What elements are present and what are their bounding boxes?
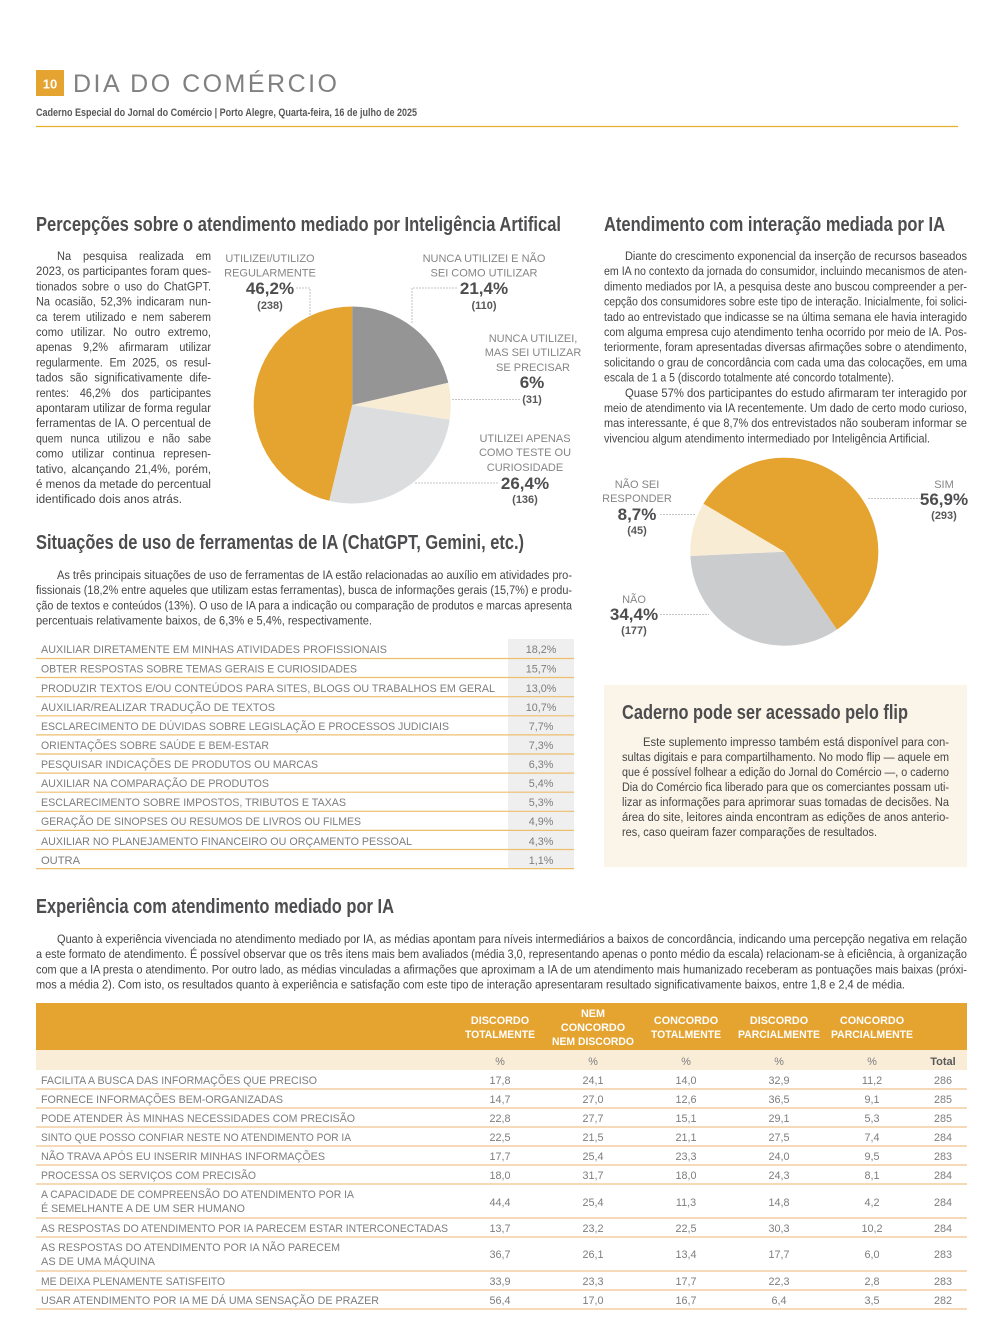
panel text: sultas digitais e para compartilhamento. No modo flip — aquele em xyxy=(622,750,949,764)
row xyxy=(36,1294,967,1309)
row xyxy=(36,797,574,811)
label: utilizei regularmente: (238) xyxy=(257,300,283,312)
row xyxy=(36,664,574,678)
pie chart: uso de IA xyxy=(224,252,581,506)
row: 17,7 xyxy=(675,1276,697,1288)
row xyxy=(36,1112,967,1127)
table header: % xyxy=(681,1056,691,1068)
row: AUXILIAR/REALIZAR TRADUÇÃO DE TEXTOS xyxy=(41,701,275,714)
publication title: DIA DO COMÉRCIO xyxy=(73,69,337,98)
table header: DISCORDO xyxy=(750,1015,808,1027)
row xyxy=(36,1074,967,1089)
text block: atendimento: escala de 1 a 5 (discordo totalmente até concordo totalmente). xyxy=(604,371,894,385)
panel text: res, caso queiram fazer comparações de resultados. xyxy=(622,825,877,839)
label: teste ou curiosidade: CURIOSIDADE xyxy=(487,462,563,474)
row: 44,4 xyxy=(489,1197,511,1209)
row: 18,2% xyxy=(526,644,557,656)
label: não: (177) xyxy=(621,625,647,637)
panel text: Dia do Comércio fica liberado para que os comerciantes possam uti- xyxy=(622,780,949,794)
row: 14,7 xyxy=(489,1094,511,1106)
label: não sei responder: (45) xyxy=(627,525,647,537)
row: 4,2 xyxy=(864,1197,880,1209)
row: 4,9% xyxy=(529,816,554,828)
row: 18,0 xyxy=(489,1170,511,1182)
row: 284 xyxy=(934,1197,952,1209)
label: não xyxy=(610,593,709,637)
row xyxy=(36,1276,967,1290)
row xyxy=(36,1150,967,1165)
row: 23,3 xyxy=(582,1276,604,1288)
row xyxy=(36,720,574,735)
table header: NEM xyxy=(581,1008,605,1020)
label: teste ou curiosidade: (136) xyxy=(512,494,538,506)
row: 33,9 xyxy=(489,1276,511,1288)
text block: percepções: apenas 9,2% afirmaram utilizar xyxy=(36,340,211,354)
row: 31,7 xyxy=(582,1170,604,1182)
text block: situações: As três principais situações de uso de ferramentas de IA estão relacionadas ao auxílio em atividades pro- xyxy=(57,568,572,582)
row: 12,6 xyxy=(675,1094,697,1106)
label: não sei responder: 8,7% xyxy=(618,505,656,524)
row: 27,7 xyxy=(582,1113,604,1125)
label: nunca utilizei mas sei: SE PRECISAR xyxy=(496,362,570,374)
slice: nunca utilizei mas sei xyxy=(352,383,451,420)
table: experiência xyxy=(36,1003,967,1309)
label: nunca utilizei mas sei: (31) xyxy=(522,394,542,406)
row: 283 xyxy=(934,1249,952,1261)
row: 6,4 xyxy=(771,1295,787,1307)
label: sim: SIM xyxy=(934,479,954,491)
row: 15,1 xyxy=(675,1113,697,1125)
table: situações de uso xyxy=(36,639,574,869)
row: 1,1% xyxy=(529,855,554,867)
text block: percepções: ca terem utilizado e nem saberem xyxy=(36,310,211,324)
slice: não xyxy=(690,552,837,646)
row: 13,0% xyxy=(526,683,557,695)
row xyxy=(36,836,574,850)
text block: percepções: Na pesquisa realizada em xyxy=(57,249,211,263)
row: 26,1 xyxy=(582,1249,604,1261)
row: 285 xyxy=(934,1094,952,1106)
text block: percepções: ferramentas de IA. O percentual de xyxy=(36,416,211,430)
row: 3,5 xyxy=(864,1295,880,1307)
row: 7,4 xyxy=(864,1132,880,1144)
row: 282 xyxy=(934,1295,952,1307)
row: PRODUZIR TEXTOS E/OU CONTEÚDOS PARA SITES, BLOGS OU TRABALHOS EM GERAL xyxy=(41,682,495,695)
row: FACILITA A BUSCA DAS INFORMAÇÕES QUE PRECISO xyxy=(41,1074,317,1087)
row xyxy=(36,758,574,773)
label: nunca utilizei e não sei: 21,4% xyxy=(460,279,508,298)
text block: atendimento: Quase 57% dos participantes do estudo afirmaram ter interagido por xyxy=(625,386,967,400)
row: 25,4 xyxy=(582,1197,604,1209)
label: nunca utilizei e não sei: NUNCA UTILIZEI E NÃO xyxy=(423,252,546,265)
row: 11,2 xyxy=(862,1075,882,1087)
label: nunca utilizei mas sei: NUNCA UTILIZEI, xyxy=(489,333,577,345)
row: 17,0 xyxy=(582,1295,604,1307)
table header: CONCORDO xyxy=(654,1015,718,1027)
label: teste ou curiosidade: COMO TESTE OU xyxy=(479,447,571,459)
row: 23,3 xyxy=(675,1151,697,1163)
panel heading: Caderno pode ser acessado pelo flip xyxy=(622,702,908,724)
panel text: área do site, leitores ainda encontram as edições de anos anterio- xyxy=(622,810,949,824)
row xyxy=(36,1093,967,1108)
row: PODE ATENDER ÀS MINHAS NECESSIDADES COM PRECISÃO xyxy=(41,1112,355,1125)
row: 5,4% xyxy=(529,778,554,790)
row: AUXILIAR DIRETAMENTE EM MINHAS ATIVIDADES PROFISSIONAIS xyxy=(41,644,387,656)
table header: CONCORDO xyxy=(561,1022,625,1034)
row: 36,7 xyxy=(489,1249,511,1261)
slice: nunca utilizei e não sei xyxy=(352,306,448,405)
text block: percepções: quem nunca utilizou e não sabe xyxy=(36,431,211,445)
heading: situações: Situações de uso de ferramentas de IA (ChatGPT, Gemini, etc.) xyxy=(36,532,524,554)
row: 284 xyxy=(934,1223,952,1235)
row: 6,3% xyxy=(529,759,554,771)
table header: DISCORDO xyxy=(471,1015,529,1027)
slice: utilizei regularmente xyxy=(254,306,352,501)
row: AS RESPOSTAS DO ATENDIMENTO POR IA PARECEM ESTAR INTERCONECTADAS xyxy=(41,1223,448,1235)
text block: percepções xyxy=(36,249,211,506)
label: não: NÃO xyxy=(622,593,646,606)
panel text: que é possível folhear a edição do Jornal do Comércio —, o caderno xyxy=(622,765,949,779)
row xyxy=(36,1241,967,1271)
row: 32,9 xyxy=(768,1075,790,1087)
row: 22,8 xyxy=(489,1113,511,1125)
label: nunca utilizei mas sei: 6% xyxy=(520,373,544,392)
text block: percepções: regularmente. Em 2025, os resul- xyxy=(36,355,211,369)
row: 25,4 xyxy=(582,1151,604,1163)
text block: situações: percentuais relativamente baixos, de 6,3% e 5,4%, respectivamente. xyxy=(36,614,372,628)
row xyxy=(36,1169,967,1184)
row: USAR ATENDIMENTO POR IA ME DÁ UMA SENSAÇÃO DE PRAZER xyxy=(41,1294,379,1307)
row: É SEMELHANTE A DE UM SER HUMANO xyxy=(41,1202,245,1215)
label: sim: 56,9% xyxy=(920,490,968,509)
row: 16,7 xyxy=(675,1295,697,1307)
text block: atendimento: vivenciou algum atendimento intermediado por Inteligência Artificial. xyxy=(604,431,930,445)
text block: atendimento: Diante do crescimento exponencial da inserção de recursos baseados xyxy=(625,249,967,263)
page number badge: 10 xyxy=(43,76,57,92)
label: nunca utilizei mas sei: MAS SEI UTILIZAR xyxy=(485,347,581,359)
table header: % xyxy=(774,1056,784,1068)
text block: situações: fissionais (18,2% entre aqueles que utilizam estas ferramentas), busca de informações gerais (15,7%) e produ- xyxy=(36,583,572,597)
label: nunca utilizei e não sei: (110) xyxy=(471,300,497,312)
row: 17,7 xyxy=(768,1249,790,1261)
row: ORIENTAÇÕES SOBRE SAÚDE E BEM-ESTAR xyxy=(41,739,269,752)
pie chart: interação com IA xyxy=(602,458,968,646)
row: A CAPACIDADE DE COMPREENSÃO DO ATENDIMENTO POR IA xyxy=(41,1188,354,1201)
row: 21,5 xyxy=(582,1132,604,1144)
row xyxy=(36,1188,967,1218)
text block: atendimento xyxy=(604,249,967,445)
row: 13,7 xyxy=(489,1223,511,1235)
label: teste ou curiosidade: UTILIZEI APENAS xyxy=(479,433,571,445)
row: AUXILIAR NO PLANEJAMENTO FINANCEIRO OU ORÇAMENTO PESSOAL xyxy=(41,836,412,848)
row: 4,3% xyxy=(529,836,554,848)
text block: percepções: 2023, os participantes foram ques- xyxy=(36,264,211,278)
row: 285 xyxy=(934,1113,952,1125)
text block: percepções: identificado dois anos atrás. xyxy=(36,492,182,506)
text block: percepções: como utilizar. No outro extremo, xyxy=(36,325,211,339)
text block: percepções: tativo, alcançando 21,4%, porém, xyxy=(36,462,211,476)
row: 56,4 xyxy=(489,1295,511,1307)
label: não sei responder: RESPONDER xyxy=(602,493,672,505)
row: 29,1 xyxy=(768,1113,790,1125)
label: sim: (293) xyxy=(931,510,957,522)
label: utilizei regularmente xyxy=(224,253,316,320)
masthead xyxy=(36,69,958,126)
table header: % xyxy=(588,1056,598,1068)
row: 27,0 xyxy=(582,1094,604,1106)
row: OUTRA xyxy=(41,855,81,867)
text block: percepções: apontaram utilizar de forma regular xyxy=(36,401,211,415)
row: 283 xyxy=(934,1276,952,1288)
row: 6,0 xyxy=(864,1249,880,1261)
slice: teste ou curiosidade xyxy=(329,405,450,504)
row xyxy=(36,1223,967,1237)
label: nunca utilizei e não sei: SEI COMO UTILIZAR xyxy=(431,268,538,280)
panel: caderno flip xyxy=(604,685,967,867)
row: GERAÇÃO DE SINOPSES OU RESUMOS DE LIVROS OU FILMES xyxy=(41,815,361,828)
row: 22,3 xyxy=(768,1276,790,1288)
text block: experiência xyxy=(36,932,967,992)
row: 286 xyxy=(934,1075,952,1087)
row: AS RESPOSTAS DO ATENDIMENTO POR IA NÃO PARECEM xyxy=(41,1241,340,1254)
row: 30,3 xyxy=(768,1223,790,1235)
row: 8,1 xyxy=(864,1170,880,1182)
label: nunca utilizei mas sei xyxy=(452,333,581,406)
text block: percepções: rentes: 46,2% dos participantes xyxy=(36,386,211,400)
row xyxy=(36,739,574,754)
row xyxy=(36,701,574,716)
row: ME DEIXA PLENAMENTE SATISFEITO xyxy=(41,1276,225,1288)
row: 5,3% xyxy=(529,797,554,809)
text block: percepções: como utilizar continua represen- xyxy=(36,447,211,461)
edition line: Caderno Especial do Jornal do Comércio | Porto Alegre, Quarta-feira, 16 de julho de 2025 xyxy=(36,107,417,119)
row: 2,8 xyxy=(864,1276,880,1288)
row: 24,1 xyxy=(582,1075,604,1087)
row: 27,5 xyxy=(768,1132,790,1144)
row: 22,5 xyxy=(675,1223,697,1235)
text block: situações xyxy=(36,568,572,628)
table header: Total xyxy=(930,1056,956,1068)
row xyxy=(36,855,574,869)
row: 5,3 xyxy=(864,1113,880,1125)
text block: experiência: mos a média 2). Com isto, os resultados quanto à experiência e satisfação com este tipo de interação apresentaram resultado significativamente baixos, entre 1,8 e 2,4 de média. xyxy=(36,978,905,992)
label: utilizei regularmente: REGULARMENTE xyxy=(224,268,316,280)
slice: não sei responder xyxy=(690,504,784,556)
row: ESCLARECIMENTO SOBRE IMPOSTOS, TRIBUTOS E TAXAS xyxy=(41,797,346,809)
label: sim xyxy=(868,479,968,522)
row: 24,3 xyxy=(768,1170,790,1182)
label: teste ou curiosidade xyxy=(415,433,571,506)
row: 9,1 xyxy=(864,1094,880,1106)
row xyxy=(36,644,574,658)
row xyxy=(36,777,574,792)
table header: % xyxy=(867,1056,877,1068)
row: 14,0 xyxy=(675,1075,697,1087)
row: OBTER RESPOSTAS SOBRE TEMAS GERAIS E CURIOSIDADES xyxy=(41,664,357,676)
table header: TOTALMENTE xyxy=(651,1029,721,1041)
row: SINTO QUE POSSO CONFIAR NESTE NO ATENDIMENTO POR IA xyxy=(41,1132,351,1144)
text block: percepções: Na ocasião, 52,3% indicaram nun- xyxy=(36,295,211,309)
table header: % xyxy=(495,1056,505,1068)
row: 7,7% xyxy=(529,721,554,733)
row: 22,5 xyxy=(489,1132,511,1144)
text block: percepções: é menos da metade do percentual xyxy=(36,477,211,491)
panel text: lizar as informações para aprimorar suas tomadas de decisões. Na xyxy=(622,795,949,809)
page number badge xyxy=(36,70,64,96)
text block: percepções: tionados sobre o uso do ChatGPT. xyxy=(36,279,211,293)
row: 21,1 xyxy=(675,1132,697,1144)
heading: percepções: Percepções sobre o atendimento mediado por Inteligência Artifical xyxy=(36,214,561,236)
row: 18,0 xyxy=(675,1170,697,1182)
row: 284 xyxy=(934,1170,952,1182)
row: ESCLARECIMENTO DE DÚVIDAS SOBRE LEGISLAÇÃO E PROCESSOS JUDICIAIS xyxy=(41,720,449,733)
table header: PARCIALMENTE xyxy=(738,1029,820,1041)
label: não sei responder xyxy=(602,478,695,537)
label: utilizei regularmente: 46,2% xyxy=(246,279,294,298)
row: 10,7% xyxy=(526,702,557,714)
table header: CONCORDO xyxy=(840,1015,904,1027)
table header: TOTALMENTE xyxy=(465,1029,535,1041)
label: utilizei regularmente: UTILIZEI/UTILIZO xyxy=(225,253,315,265)
label: teste ou curiosidade: 26,4% xyxy=(501,474,549,493)
row: FORNECE INFORMAÇÕES BEM-ORGANIZADAS xyxy=(41,1093,283,1106)
row: 7,3% xyxy=(529,740,554,752)
row: 13,4 xyxy=(675,1249,697,1261)
row: 10,2 xyxy=(861,1223,883,1235)
table header xyxy=(36,1003,967,1070)
slice: sim xyxy=(703,458,878,630)
row: 17,7 xyxy=(489,1151,511,1163)
text block: percepções: tados são significativamente dife- xyxy=(36,371,211,385)
row xyxy=(36,815,574,830)
row: 14,8 xyxy=(768,1197,790,1209)
row xyxy=(36,1132,967,1146)
row: 283 xyxy=(934,1151,952,1163)
row: 24,0 xyxy=(768,1151,790,1163)
row: 15,7% xyxy=(526,664,557,676)
heading: experiência: Experiência com atendimento mediado por IA xyxy=(36,896,394,918)
row: 11,3 xyxy=(676,1197,696,1209)
row: PROCESSA OS SERVIÇOS COM PRECISÃO xyxy=(41,1169,256,1182)
row: 23,2 xyxy=(582,1223,604,1235)
row: 36,5 xyxy=(768,1094,790,1106)
row: AUXILIAR NA COMPARAÇÃO DE PRODUTOS xyxy=(41,777,269,790)
row: 9,5 xyxy=(864,1151,880,1163)
table header: PARCIALMENTE xyxy=(831,1029,913,1041)
row: 284 xyxy=(934,1132,952,1144)
label: não sei responder: NÃO SEI xyxy=(615,478,659,491)
row: AS DE UMA MÁQUINA xyxy=(41,1255,156,1268)
text block: situações: ção de textos e conteúdos (13%). O uso de IA para a indicação ou comparação de produtos e marcas apresenta xyxy=(36,598,572,612)
table header: NEM DISCORDO xyxy=(552,1036,634,1048)
row: NÃO TRAVA APÓS EU INSERIR MINHAS INFORMAÇÕES xyxy=(41,1150,325,1163)
row: 17,8 xyxy=(489,1075,511,1087)
panel text xyxy=(622,735,949,839)
panel text: Este suplemento impresso também está disponível para con- xyxy=(643,735,949,749)
label: nunca utilizei e não sei xyxy=(412,252,546,323)
label: não: 34,4% xyxy=(610,605,658,624)
row: PESQUISAR INDICAÇÕES DE PRODUTOS OU MARCAS xyxy=(41,758,318,771)
